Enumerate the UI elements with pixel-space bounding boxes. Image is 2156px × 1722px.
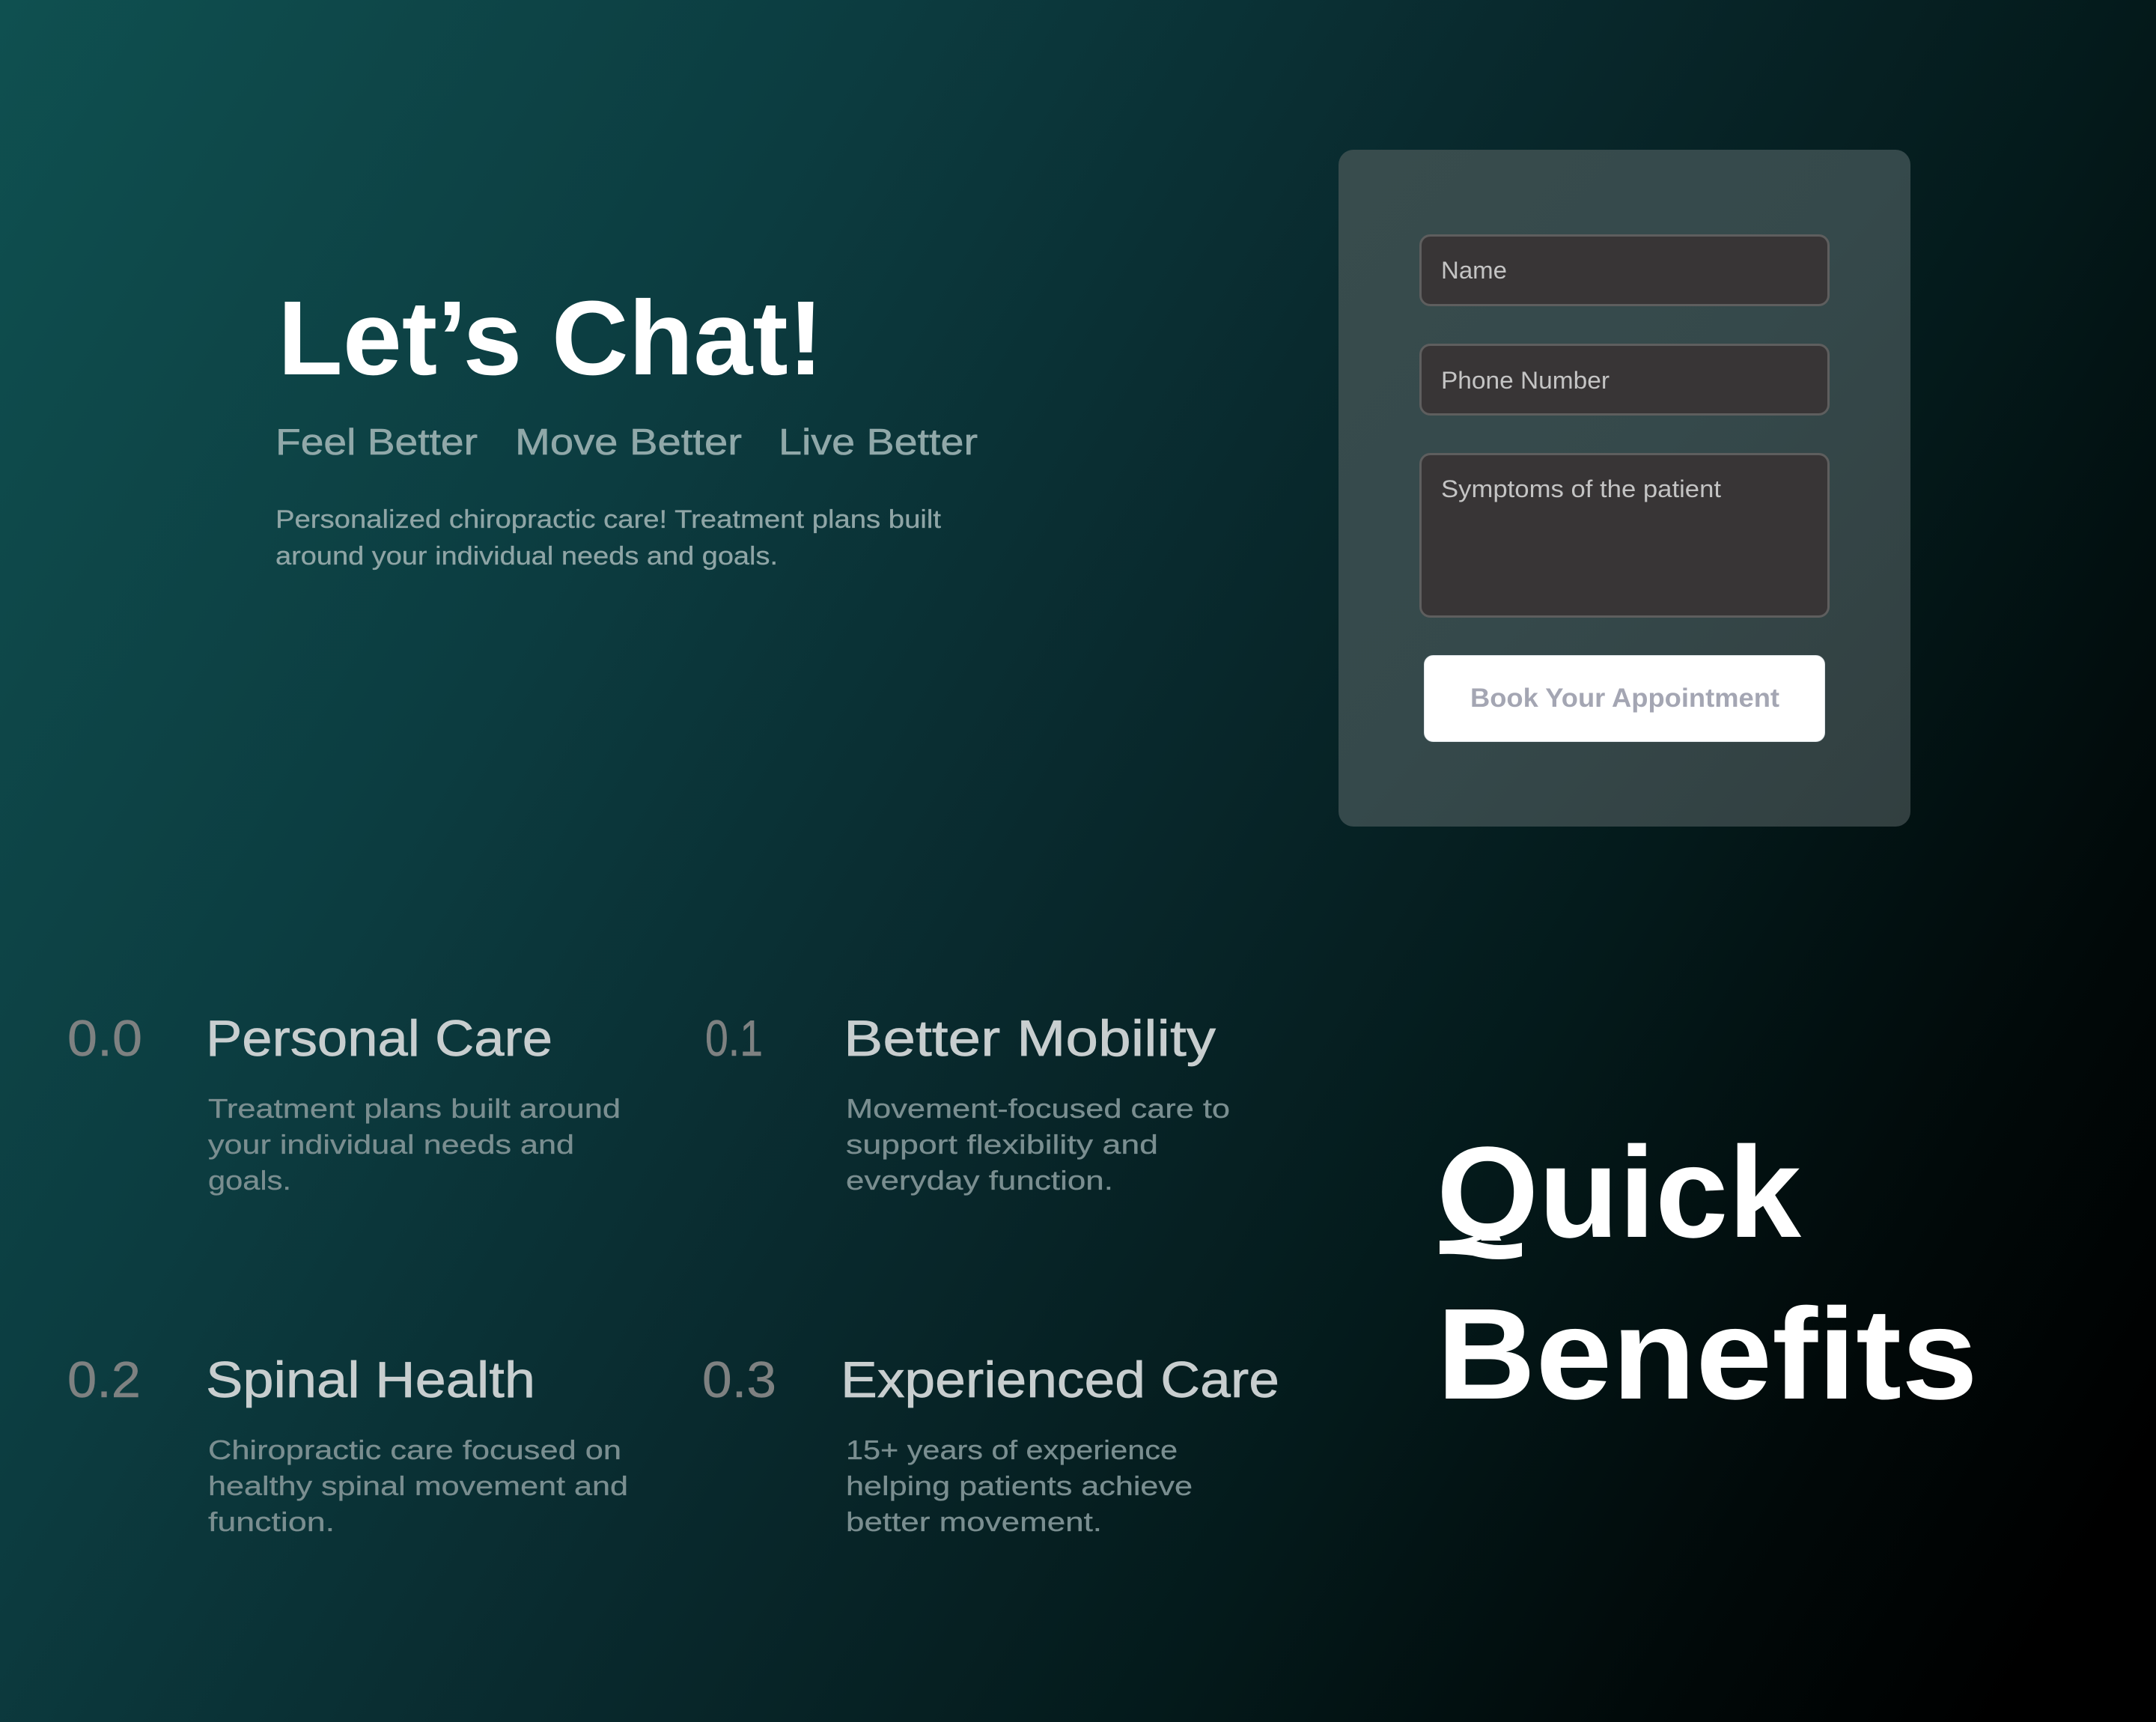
input: symptoms [1421, 454, 1828, 617]
number 0.2: 0.2 [67, 1351, 141, 1408]
intro paragraph: around your individual needs and goals. [275, 542, 778, 571]
hero: contact intro [275, 279, 978, 571]
number 0.0: 0.0 [67, 1010, 142, 1067]
description: Treatment plans built around [208, 1093, 621, 1124]
heading: quick benefits: Benefits [1437, 1281, 1978, 1426]
heading: quick benefits: Quick [1437, 1119, 1802, 1265]
number 0.3: 0.3 [702, 1351, 776, 1408]
tagline: feel better: Feel Better [275, 422, 478, 463]
input: phone number: Phone Number [1441, 367, 1610, 394]
description: Chiropractic care focused on [208, 1435, 621, 1465]
intro paragraph [275, 505, 942, 571]
button: book appointment: Book Your Appointment [1470, 684, 1779, 713]
description: function. [208, 1506, 335, 1537]
description [846, 1093, 1230, 1196]
benefit: personal care [67, 1010, 621, 1196]
description: healthy spinal movement and [208, 1470, 628, 1501]
button: book appointment [1424, 656, 1825, 741]
benefit: spinal health [67, 1351, 628, 1537]
benefit: experienced care [702, 1351, 1279, 1537]
description: support flexibility and [846, 1129, 1158, 1160]
description: everyday function. [846, 1165, 1113, 1196]
input: name: Name [1441, 257, 1507, 284]
description: better movement. [846, 1506, 1102, 1537]
tagline: move better: Move Better [515, 422, 742, 463]
input: phone number [1421, 344, 1828, 415]
panel: booking form [1339, 150, 1910, 827]
description [208, 1093, 621, 1196]
benefit: better mobility [705, 1010, 1230, 1196]
description: 15+ years of experience [846, 1435, 1178, 1465]
description: helping patients achieve [846, 1470, 1193, 1501]
description [208, 1435, 628, 1537]
description: Movement-focused care to [846, 1093, 1230, 1124]
input: symptoms: Symptoms of the patient [1441, 475, 1721, 502]
description: goals. [208, 1165, 291, 1196]
tagline: live better: Live Better [779, 422, 978, 463]
heading: Spinal Health [206, 1351, 535, 1408]
input: name [1421, 235, 1828, 305]
description [846, 1435, 1193, 1537]
heading: Experienced Care [841, 1351, 1279, 1408]
heading: quick benefits [1440, 1143, 1972, 1400]
intro paragraph: Personalized chiropractic care! Treatment plans built [275, 505, 942, 534]
heading: Personal Care [206, 1010, 552, 1067]
description: your individual needs and [208, 1129, 574, 1160]
number 0.1: 0.1 [705, 1010, 763, 1067]
title: Let’s Chat! [278, 279, 823, 397]
heading: Better Mobility [844, 1010, 1216, 1067]
